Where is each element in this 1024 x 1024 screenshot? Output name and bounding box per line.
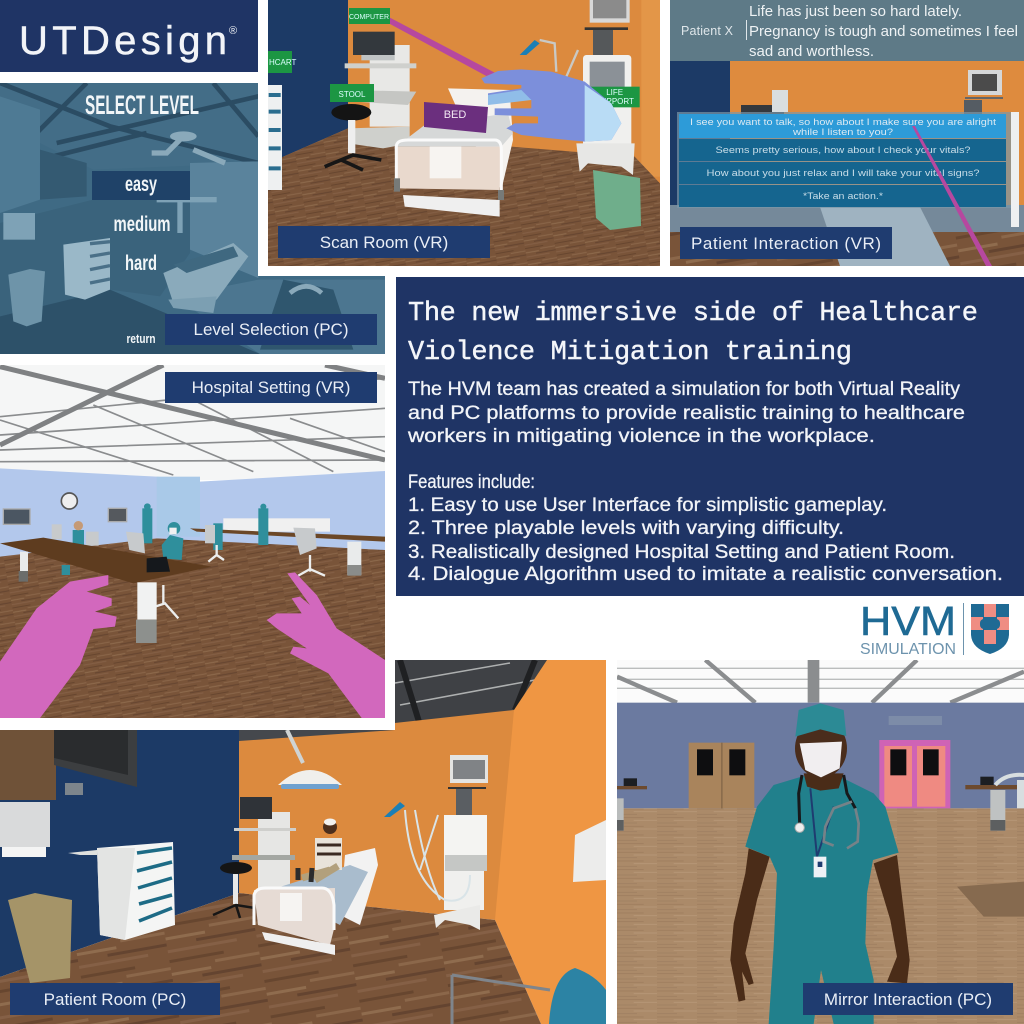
label: patient interaction	[680, 227, 892, 259]
tag: life support: SUPPORT	[595, 97, 634, 106]
label: patient interaction: Patient Interaction (VR)	[691, 234, 881, 253]
bed	[394, 88, 513, 217]
wastebin hologram	[593, 170, 641, 230]
storage cabinet	[268, 85, 282, 190]
doctor figure	[730, 703, 910, 1024]
tag: computer: COMPUTER	[349, 14, 389, 21]
panel: hospital setting	[0, 365, 385, 718]
patient	[298, 818, 342, 882]
tag: life support: LIFE	[606, 88, 623, 97]
bed with patient	[254, 818, 378, 955]
patient speech	[750, 5, 1017, 56]
intro paragraph	[407, 379, 965, 447]
option: hard: hard	[125, 252, 157, 275]
dialogue panel	[677, 112, 1019, 227]
tag: life support	[590, 86, 640, 108]
panel: scan room	[268, 0, 660, 266]
logo: HVM Simulation	[860, 598, 1009, 658]
logo: UTDesign	[0, 0, 258, 72]
heading: Violence Mitigation training	[408, 338, 852, 368]
patient speech: Pregnancy is tough and sometimes I feel	[749, 23, 1018, 40]
hand: blue glove	[481, 69, 621, 142]
surgical lamp	[278, 730, 342, 789]
stool	[325, 104, 381, 170]
label: scan room: Scan Room (VR)	[320, 233, 448, 252]
label: scan room	[278, 226, 490, 258]
subtitle speaker: Patient X	[681, 24, 734, 38]
option: easy: easy	[125, 173, 157, 196]
cap	[795, 703, 846, 737]
option 4	[679, 185, 1006, 207]
tag: stool: STOOL	[339, 90, 366, 99]
features list	[408, 472, 1003, 585]
mask	[800, 742, 842, 777]
tag: bed	[424, 102, 488, 133]
option 2	[679, 139, 1006, 161]
option 2: Seems pretty serious, how about I check your vitals?	[716, 145, 970, 156]
option: medium: medium	[114, 213, 170, 236]
arms	[730, 848, 770, 1002]
tag: cart	[268, 51, 297, 73]
panel: description text	[396, 277, 1024, 596]
stool	[213, 862, 255, 918]
panel: patient interaction	[670, 0, 1024, 266]
pointer beam	[390, 18, 494, 76]
chair frame	[452, 975, 550, 1024]
features list: 3. Realistically designed Hospital Setting and Patient Room.	[408, 542, 955, 563]
wall TV	[54, 730, 137, 795]
option: return: return	[126, 331, 156, 346]
tag: computer	[349, 8, 390, 24]
label: mirror interaction: Mirror Interaction (PC)	[824, 990, 992, 1009]
computer cart	[345, 32, 416, 148]
features list: 2. Three playable levels with varying difficulty.	[408, 518, 844, 539]
stethoscope	[795, 775, 859, 857]
label: patient room	[10, 983, 220, 1015]
option 1	[679, 114, 1006, 138]
tag: cart: HCART	[269, 58, 297, 67]
panel: patient room	[0, 660, 606, 1024]
ventilator	[384, 755, 488, 930]
pointer beam	[912, 126, 992, 266]
patient speech: Life has just been so hard lately.	[749, 3, 962, 20]
option 3: How about you just relax and I will take your vital signs?	[706, 168, 980, 179]
waste bin	[8, 893, 72, 983]
label: hospital setting	[165, 372, 377, 403]
tag: stool	[330, 84, 374, 102]
scrubs	[745, 776, 899, 1024]
label: patient room: Patient Room (PC)	[44, 990, 186, 1009]
intro paragraph: The HVM team has created a simulation for both Virtual Reality	[408, 379, 961, 400]
logo: HVM Simulation: HVM	[860, 598, 956, 644]
option: easy	[92, 171, 190, 200]
features list: Features include:	[408, 472, 535, 493]
intro paragraph: workers in mitigating violence in the workplace.	[407, 426, 875, 447]
label: mirror interaction	[803, 983, 1013, 1015]
logo: HVM Simulation: SIMULATION	[860, 641, 956, 658]
computer cart	[232, 797, 296, 890]
logo: UTDesign: UTDesign	[19, 19, 227, 63]
side desks	[617, 775, 1024, 831]
panel: mirror interaction	[617, 660, 1024, 1024]
title: select level: SELECT LEVEL	[85, 90, 199, 120]
label: hospital setting: Hospital Setting (VR)	[192, 378, 350, 397]
desk	[0, 538, 212, 643]
blue chair	[549, 968, 606, 1024]
wall dispenser	[573, 820, 606, 882]
heading	[408, 299, 978, 368]
neck and head	[804, 773, 844, 791]
option 1: while I listen to you?	[792, 127, 893, 138]
label: level selection: Level Selection (PC)	[194, 320, 348, 339]
features list: 1. Easy to use User Interface for simplistic gameplay.	[408, 495, 887, 516]
chairs	[52, 524, 317, 555]
option 3	[679, 162, 1006, 184]
hand: right pink	[267, 572, 385, 718]
icon: shield	[971, 604, 1009, 654]
logo: UTDesign: ®	[229, 25, 237, 37]
staff figures	[62, 503, 268, 575]
badge	[814, 857, 826, 877]
wooden shelf	[0, 730, 56, 800]
ventilator	[520, 0, 635, 175]
whiteboard	[0, 802, 50, 857]
pink doors	[879, 740, 950, 808]
storage cabinet	[68, 842, 175, 940]
panel: level selection	[0, 83, 385, 354]
wooden doors	[689, 743, 754, 808]
tag: bed: BED	[444, 109, 466, 121]
features list: 4. Dialogue Algorithm used to imitate a realistic conversation.	[408, 564, 1003, 585]
hand: left pink	[0, 575, 117, 718]
label: level selection	[165, 314, 377, 345]
patient speech: sad and worthless.	[749, 43, 874, 60]
option 1: I see you want to talk, so how about I make sure you are alright	[690, 117, 996, 128]
door sign	[889, 716, 942, 725]
back table	[190, 518, 385, 576]
option 4: *Take an action.*	[803, 191, 883, 202]
intro paragraph: and PC platforms to provide realistic training to healthcare	[408, 403, 965, 424]
heading: The new immersive side of Healthcare	[408, 299, 978, 329]
